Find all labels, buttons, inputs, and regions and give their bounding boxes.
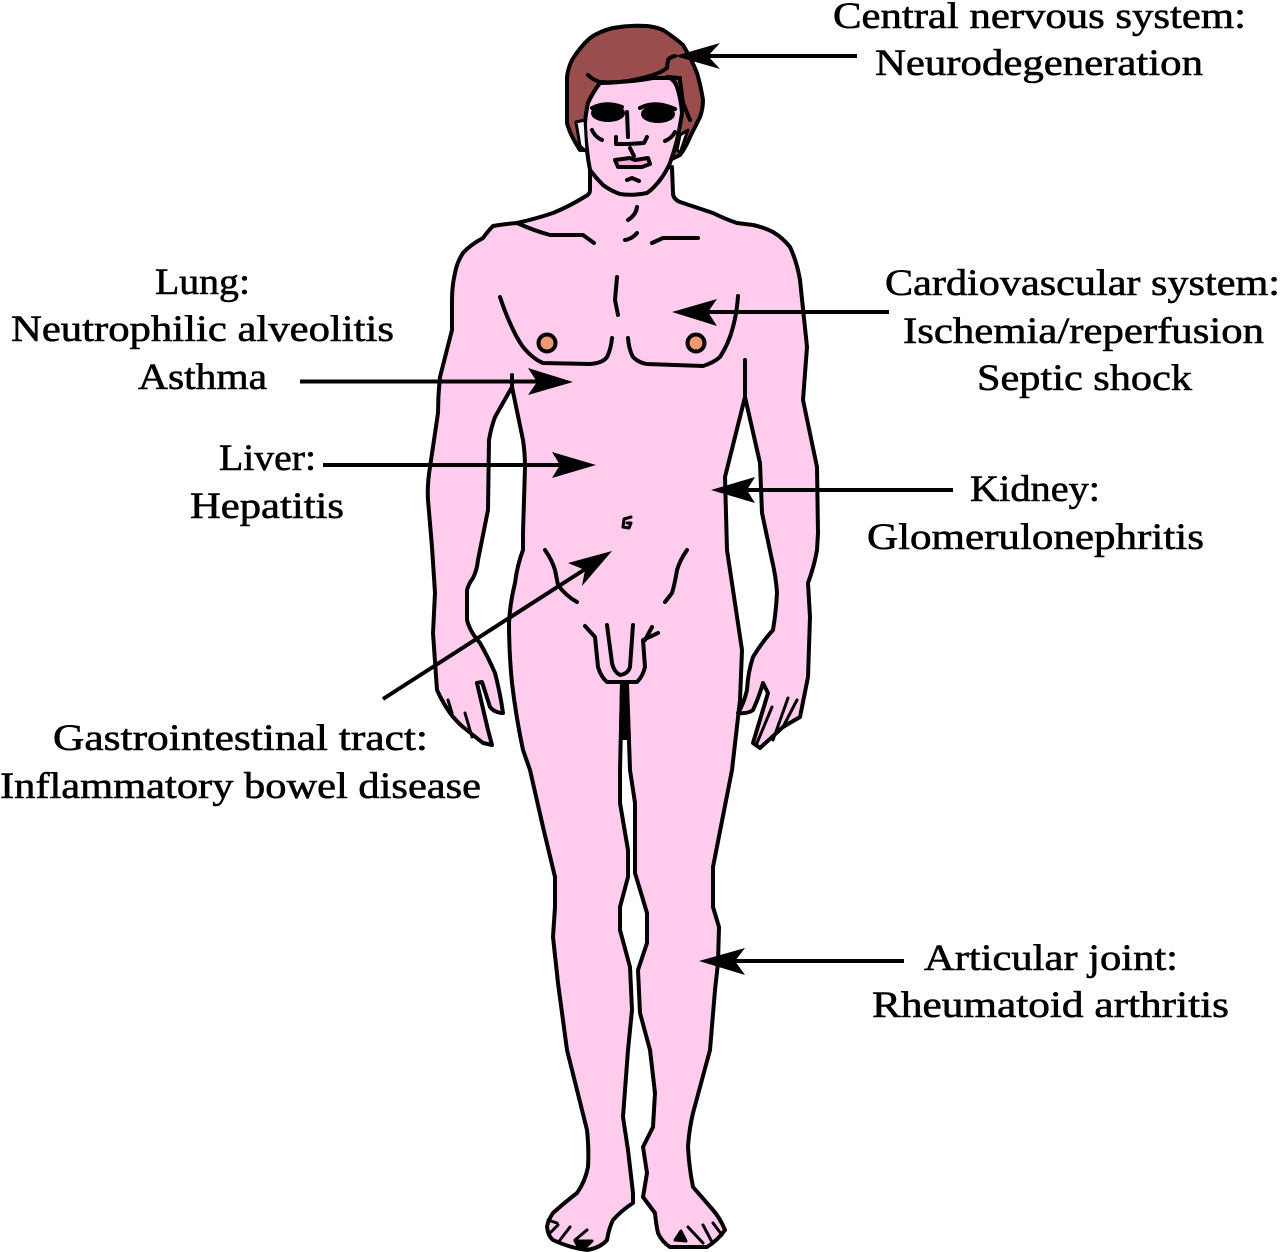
arrow: gastrointestinal tract: [383, 551, 612, 699]
arrow: liver: [323, 452, 596, 478]
label: lung: Asthma: [138, 357, 267, 398]
arrow: kidney: [711, 477, 953, 503]
label: articular joint: Rheumatoid arthritis: [872, 985, 1229, 1026]
label: liver: Liver:: [219, 438, 316, 479]
arrow: articular joint: [699, 948, 904, 975]
nipple: left: [538, 334, 556, 352]
label: cardiovascular system: Septic shock: [977, 358, 1193, 399]
label: kidney: [867, 469, 1204, 558]
facial features: [576, 56, 690, 181]
human figure: [428, 26, 818, 1250]
label: cardiovascular system: Cardiovascular system:: [885, 263, 1280, 304]
label: cardiovascular system: Ischemia/reperfusion: [903, 311, 1264, 352]
arrow: lung: [300, 368, 573, 395]
label: articular joint: [872, 938, 1229, 1026]
face: [585, 78, 682, 195]
fingers and toes: [448, 698, 797, 1247]
label: gastrointestinal tract: Inflammatory bowel disease: [0, 766, 481, 807]
label: lung: [11, 262, 394, 398]
chest and abdomen lines: [500, 207, 745, 602]
label: cardiovascular system: [885, 263, 1280, 399]
label: gastrointestinal tract: Gastrointestinal tract:: [53, 718, 428, 759]
label: lung: Lung:: [155, 262, 250, 303]
label: liver: Hepatitis: [190, 486, 344, 527]
label: central nervous system: Neurodegeneration: [875, 43, 1203, 84]
label: gastrointestinal tract: [0, 718, 481, 807]
label: articular joint: Articular joint:: [924, 938, 1178, 979]
label: liver: [190, 438, 344, 527]
groin lines: [585, 625, 658, 740]
arrow: central nervous system: [675, 43, 857, 69]
label: central nervous system: [833, 0, 1246, 84]
label: kidney: Kidney:: [970, 469, 1100, 510]
body outline: [428, 167, 818, 1250]
nipple: right: [688, 334, 704, 352]
hair: [567, 26, 703, 160]
arrow: cardiovascular system: [672, 299, 889, 326]
label: lung: Neutrophilic alveolitis: [11, 309, 394, 350]
label: kidney: Glomerulonephritis: [867, 517, 1204, 558]
